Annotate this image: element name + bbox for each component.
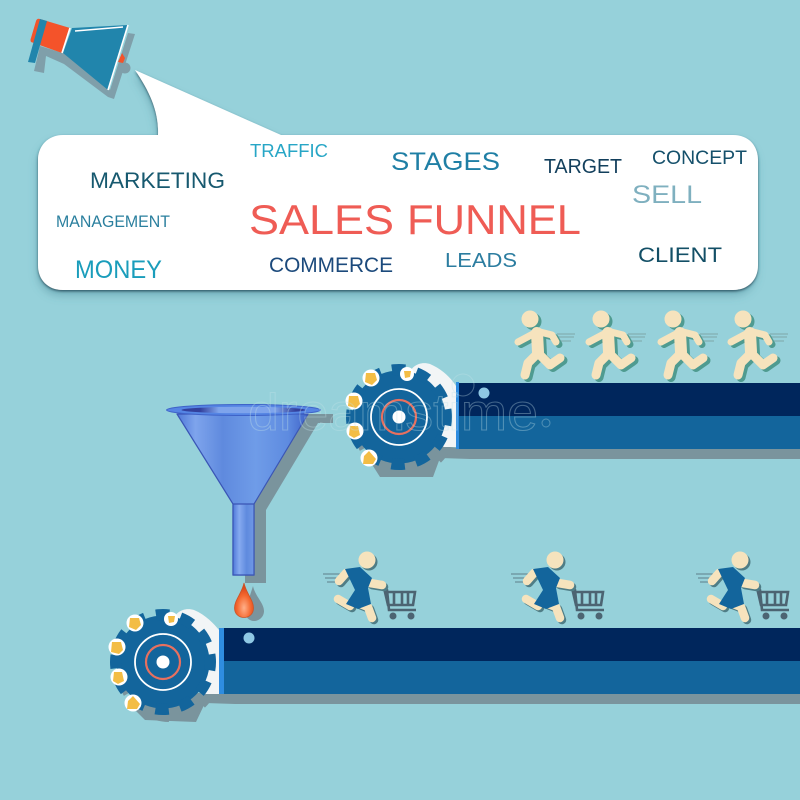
- keyword: target: TARGET: [544, 156, 622, 178]
- icon: funnel: [166, 404, 333, 583]
- keyword: sell: SELL: [632, 181, 702, 209]
- panel: speech bubble: [38, 70, 758, 290]
- keyword: management: MANAGEMENT: [56, 212, 170, 231]
- keyword: stages: STAGES: [391, 148, 500, 176]
- conveyor: bottom with gear and hand: [108, 609, 800, 722]
- keyword: leads: LEADS: [445, 250, 517, 272]
- runners: top row: [518, 311, 788, 378]
- keyword: commerce: COMMERCE: [269, 254, 393, 277]
- keyword: money: MONEY: [75, 256, 162, 284]
- shoppers: bottom row: [323, 552, 789, 620]
- keyword: concept: CONCEPT: [652, 148, 747, 169]
- heading: sales funnel: SALES: [249, 196, 394, 243]
- heading: sales funnel: [249, 196, 581, 243]
- watermark: dreamstime: [248, 384, 538, 442]
- keyword: traffic: TRAFFIC: [250, 141, 328, 161]
- icon: drop: [234, 583, 264, 621]
- icon: megaphone: [28, 19, 135, 99]
- keyword: marketing: MARKETING: [90, 168, 225, 193]
- keyword: client: CLIENT: [638, 244, 722, 267]
- heading: sales funnel: FUNNEL: [407, 196, 581, 243]
- conveyor: top with gear and hand: [346, 363, 800, 477]
